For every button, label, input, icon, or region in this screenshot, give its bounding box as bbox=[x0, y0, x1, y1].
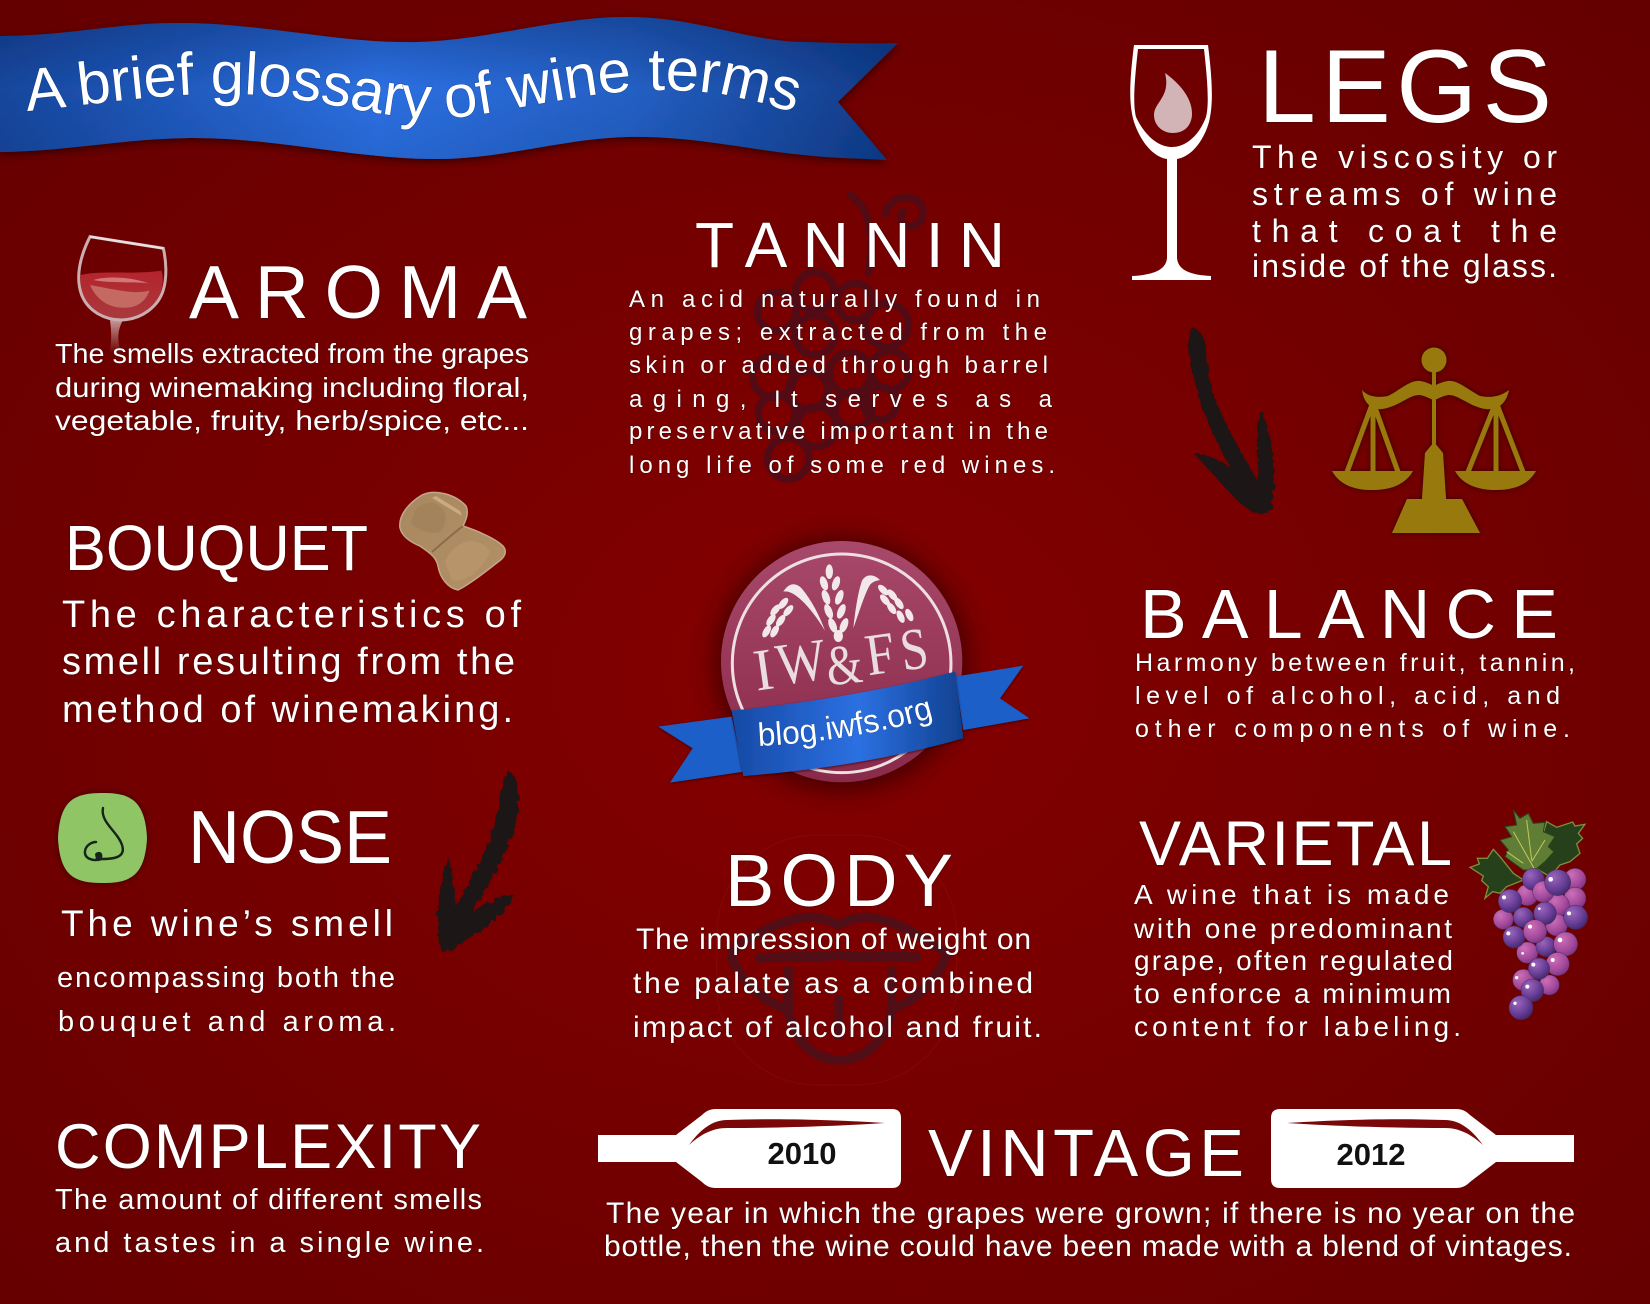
nose description: bouquet and aroma. bbox=[58, 1006, 396, 1038]
body description: the palate as a combined bbox=[633, 967, 1033, 1000]
legs description bbox=[1252, 139, 1557, 284]
body description: impact of alcohol and fruit. bbox=[633, 1011, 1042, 1044]
panel: tannin bbox=[629, 195, 1055, 479]
icon: wine glass with drop bbox=[1130, 45, 1212, 280]
balance description: level of alcohol, acid, and bbox=[1135, 682, 1560, 710]
icon: grape outline watermark bbox=[753, 195, 923, 479]
badge letters: S bbox=[896, 614, 932, 684]
wheat ears bbox=[760, 564, 915, 642]
nose description: The wine’s smell bbox=[61, 903, 393, 944]
icon: balance scales bbox=[1332, 348, 1536, 533]
ribbon url: blog.iwfs.org bbox=[758, 701, 932, 750]
panel: legs bbox=[1130, 29, 1557, 284]
heading: varietal: VARIETAL bbox=[1139, 809, 1452, 879]
panel: body bbox=[633, 835, 1042, 1085]
heading: bouquet: BOUQUET bbox=[65, 512, 368, 584]
icon: lips and tongue watermark bbox=[717, 835, 957, 1085]
icon: champagne cork bbox=[400, 492, 505, 590]
icon: grape bunch bbox=[1470, 810, 1588, 1020]
badge letters: & bbox=[823, 633, 865, 698]
badge letters: W bbox=[772, 626, 830, 698]
complexity description: The amount of different smells bbox=[55, 1184, 482, 1216]
body description: The impression of weight on bbox=[636, 923, 1031, 956]
panel: aroma bbox=[55, 237, 529, 436]
arrow: brush stroke from bouquet bbox=[440, 773, 516, 950]
balance description: other components of wine. bbox=[1135, 715, 1570, 743]
ribbon tails bbox=[658, 666, 1029, 783]
badge letters bbox=[749, 614, 932, 704]
badge shadow bbox=[716, 538, 968, 790]
panel: balance bbox=[1135, 575, 1575, 743]
badge emblem bbox=[658, 541, 1030, 785]
vintage description: The year in which the grapes were grown; if there is no year on the bbox=[606, 1197, 1575, 1230]
heading: vintage: VINTAGE bbox=[928, 1116, 1244, 1191]
panel: vintage bbox=[598, 1109, 1575, 1263]
legs description: inside of the glass. bbox=[1252, 248, 1557, 284]
vintage description bbox=[604, 1197, 1575, 1263]
bouquet description: method of winemaking. bbox=[62, 689, 513, 731]
bouquet description: The characteristics of bbox=[62, 594, 521, 636]
aroma description: during winemaking including floral, bbox=[55, 372, 529, 403]
aroma description: vegetable, fruity, herb/spice, etc... bbox=[55, 405, 529, 436]
aroma description: The smells extracted from the grapes bbox=[55, 338, 529, 369]
nose description bbox=[57, 903, 396, 1038]
banner title text: A brief glossary of wine terms bbox=[26, 50, 800, 130]
badge letters: I bbox=[749, 635, 778, 704]
legs description: streams of wine bbox=[1252, 176, 1557, 212]
complexity description: and tastes in a single wine. bbox=[55, 1227, 484, 1259]
tannin description: long life of some red wines. bbox=[629, 452, 1055, 479]
varietal description: A wine that is made bbox=[1134, 879, 1449, 910]
arrow: brush stroke to balance bbox=[1190, 330, 1272, 512]
icon: bottle 2012 bbox=[1271, 1109, 1574, 1188]
banner ribbon bbox=[0, 17, 898, 160]
icon: tilted wine glass bbox=[79, 237, 166, 353]
complexity description bbox=[55, 1184, 484, 1259]
icon: nose on green squircle bbox=[58, 793, 147, 883]
badge letters: F bbox=[861, 619, 899, 688]
ribbon band bbox=[732, 672, 963, 776]
varietal description: with one predominant bbox=[1133, 913, 1452, 944]
heading: balance: BALANCE bbox=[1140, 575, 1558, 653]
bouquet description: smell resulting from the bbox=[62, 641, 515, 683]
tannin description bbox=[629, 286, 1055, 479]
heading: complexity: COMPLEXITY bbox=[55, 1112, 481, 1182]
legs description: that coat the bbox=[1252, 213, 1557, 249]
panel: varietal bbox=[1133, 809, 1588, 1042]
year label: 2012 bbox=[1337, 1137, 1405, 1172]
panel: bouquet bbox=[62, 492, 521, 731]
aroma description bbox=[55, 338, 529, 436]
balance description: Harmony between fruit, tannin, bbox=[1135, 649, 1575, 677]
tannin description: preservative important in the bbox=[629, 418, 1048, 445]
heading: nose: NOSE bbox=[188, 795, 392, 879]
body description bbox=[633, 923, 1042, 1044]
varietal description: grape, often regulated bbox=[1134, 945, 1453, 976]
varietal description bbox=[1133, 879, 1461, 1042]
title banner bbox=[0, 16, 898, 168]
heading: body: BODY bbox=[725, 839, 953, 922]
icon: bottle 2010 bbox=[598, 1109, 901, 1188]
nose description: encompassing both the bbox=[57, 962, 395, 994]
legs description: The viscosity or bbox=[1252, 139, 1557, 175]
heading: legs: LEGS bbox=[1258, 29, 1552, 145]
panel: nose bbox=[57, 793, 396, 1038]
varietal description: content for labeling. bbox=[1134, 1011, 1461, 1042]
varietal description: to enforce a minimum bbox=[1134, 978, 1451, 1009]
heading: tannin: TANNIN bbox=[695, 209, 1005, 281]
year label: 2010 bbox=[768, 1136, 836, 1171]
panel: complexity bbox=[55, 1112, 484, 1259]
tannin description: aging, It serves as a bbox=[629, 386, 1053, 413]
tannin description: An acid naturally found in bbox=[629, 286, 1040, 313]
balance description bbox=[1135, 649, 1575, 743]
heading: aroma: AROMA bbox=[189, 250, 527, 334]
tannin description: grapes; extracted from the bbox=[629, 319, 1047, 346]
tannin description: skin or added through barrel bbox=[629, 352, 1048, 379]
logo badge bbox=[658, 524, 1030, 804]
bouquet description bbox=[62, 594, 521, 731]
vintage description: bottle, then the wine could have been made with a blend of vintages. bbox=[604, 1230, 1572, 1263]
